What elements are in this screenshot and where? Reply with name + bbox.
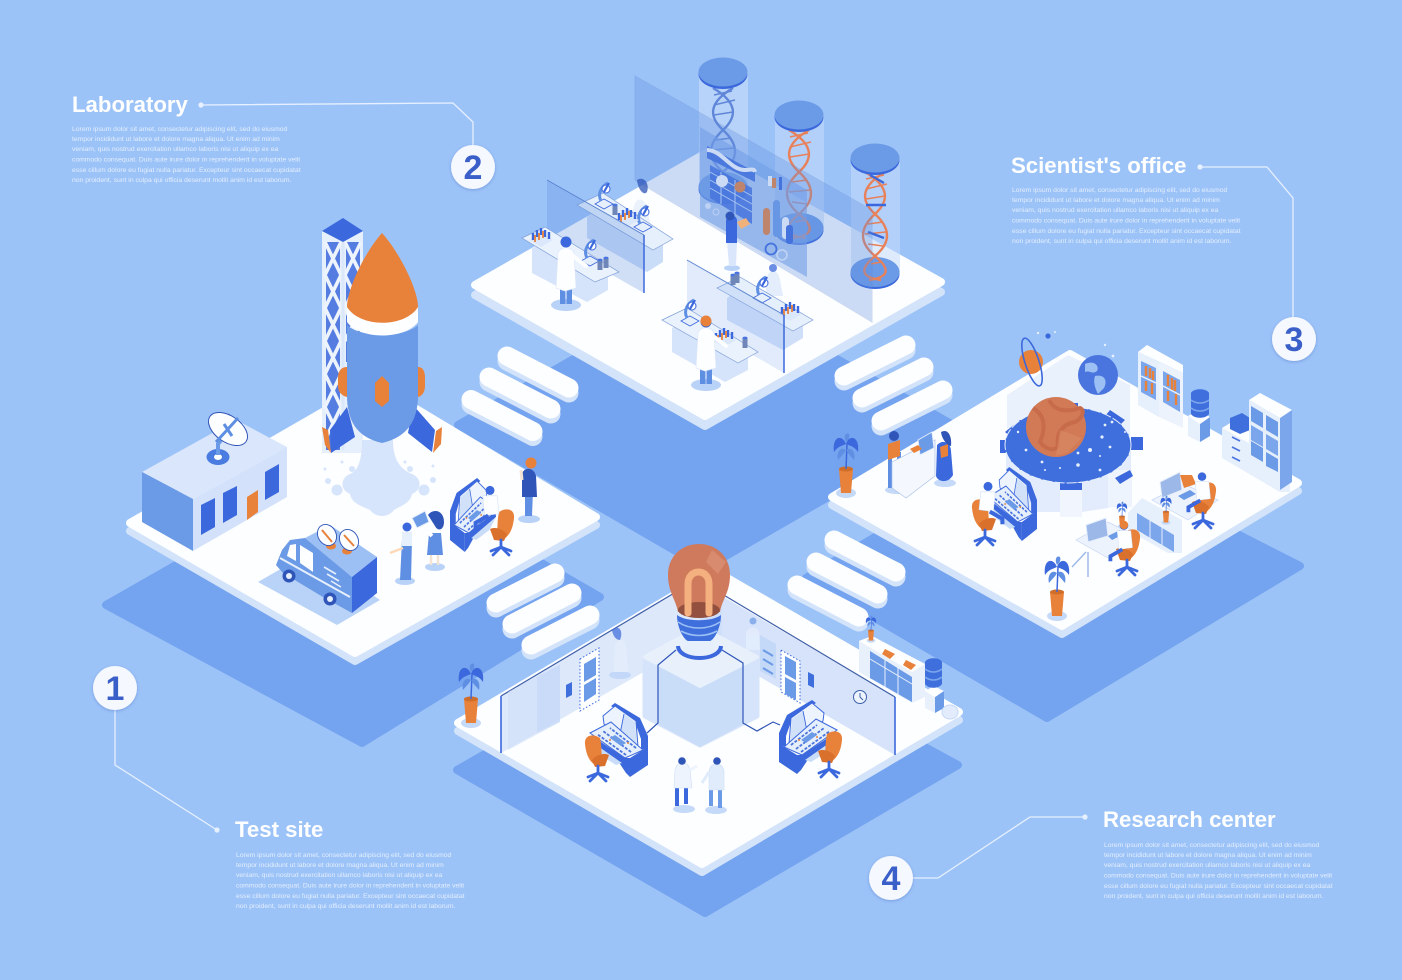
badge 3 (1272, 317, 1316, 361)
connector to badge 1 (115, 708, 220, 833)
plant front (1045, 556, 1069, 621)
partition A (547, 180, 644, 293)
description: esse cillum dolore eu fugiat nulla pariatur. Excepteur sint occaecat cupidatat (236, 893, 465, 900)
mars (1026, 397, 1086, 457)
panel: research center (458, 544, 959, 872)
description: tempor incididunt ut labore et dolore magna aliqua. Ut enim ad minim (72, 136, 280, 143)
stairs: laboratory to office (844, 345, 943, 426)
badge 4: 4 (882, 860, 901, 898)
description: non proident, sunt in culpa qui officia deserunt mollit anim id est laborum. (1012, 238, 1231, 245)
description: veniam, quis nostrud exercitation ullamco laboris nisi ut aliquip ex ea (72, 146, 278, 153)
holographic board (700, 127, 807, 277)
plant left (834, 433, 858, 498)
water cooler (1188, 389, 1210, 442)
description: veniam, quis nostrud exercitation ullamco laboris nisi ut aliquip ex ea (1012, 207, 1218, 214)
description: Lorem ipsum dolor sit amet, consectetur adipiscing elit, sed do eiusmod (72, 126, 288, 133)
scientist at the board (724, 212, 750, 271)
test site console and operator (450, 478, 514, 555)
scientist behind front bench (766, 264, 783, 296)
panel: laboratory (475, 58, 941, 426)
stairs: laboratory to test site (471, 356, 569, 436)
building with dish (142, 406, 287, 551)
connector to badge 4 (913, 814, 1088, 878)
description: tempor incididunt ut labore et dolore magna aliqua. Ut enim ad minim (236, 862, 444, 869)
back glass partition (635, 76, 872, 322)
saturn and stars (1018, 331, 1114, 388)
partition cabinet (1128, 498, 1182, 553)
scientist with lab coat, left (551, 236, 586, 311)
person behind wall, right (746, 618, 760, 650)
bench C (662, 300, 758, 382)
description: Lorem ipsum dolor sit amet, consectetur adipiscing elit, sed do eiusmod (1012, 187, 1228, 194)
description: non proident, sunt in culpa qui officia deserunt mollit anim id est laborum. (1104, 893, 1323, 900)
description: commodo consequat. Duis aute irure dolor in reprehenderit in voluptate velit (1012, 218, 1240, 224)
sideboard with plant (859, 616, 925, 703)
bench D (717, 272, 813, 350)
description (1012, 187, 1241, 245)
test site floor (130, 383, 596, 661)
badge 3: 3 (1285, 321, 1303, 359)
van with dishes (258, 521, 380, 625)
bench B with partition (577, 183, 673, 272)
laboratory floor (475, 152, 941, 426)
bookshelves (1138, 345, 1183, 428)
wires (647, 650, 780, 733)
description (1104, 842, 1333, 900)
office floor (832, 354, 1298, 634)
badge 1 (93, 666, 137, 710)
bench A (522, 227, 619, 302)
DNA cylinders (698, 58, 900, 289)
scientist behind bench (632, 179, 651, 228)
people with tablet (390, 511, 445, 585)
label: Laboratory (72, 92, 301, 184)
stairs: test site to research (496, 573, 590, 650)
description: tempor incididunt ut labore et dolore magna aliqua. Ut enim ad minim (1104, 852, 1312, 859)
description (72, 126, 301, 184)
right console and chair (779, 700, 842, 777)
light bulb (668, 544, 730, 658)
partition C (687, 260, 784, 373)
description (236, 852, 465, 910)
office console with operator (972, 467, 1037, 545)
round holo table (1000, 403, 1143, 517)
cabinet with shelves (1222, 393, 1292, 492)
doors and wall details (566, 635, 866, 711)
launch tower (322, 218, 363, 453)
pedestal (645, 627, 757, 747)
panel: scientist's office (832, 331, 1298, 634)
heading: Laboratory (72, 92, 189, 117)
description: esse cillum dolore eu fugiat nulla pariatur. Excepteur sint occaecat cupidatat (1012, 228, 1241, 235)
description: commodo consequat. Duis aute irure dolor in reprehenderit in voluptate velit (72, 156, 300, 164)
floor shadows (106, 284, 1300, 913)
description: Lorem ipsum dolor sit amet, consectetur adipiscing elit, sed do eiusmod (236, 852, 452, 859)
description: non proident, sunt in culpa qui officia deserunt mollit anim id est laborum. (236, 903, 455, 910)
research floor (458, 571, 959, 872)
badge 1: 1 (106, 670, 124, 708)
description: commodo consequat. Duis aute irure dolor in reprehenderit in voluptate velit (1104, 872, 1332, 880)
badge 4 (869, 856, 913, 900)
earth (1078, 355, 1118, 395)
plant (459, 663, 483, 728)
badge 2: 2 (464, 149, 482, 187)
glass backdrop (1007, 355, 1130, 470)
description: non proident, sunt in culpa qui officia deserunt mollit anim id est laborum. (72, 177, 291, 184)
description: Lorem ipsum dolor sit amet, consectetur adipiscing elit, sed do eiusmod (1104, 842, 1320, 849)
rocket (322, 233, 442, 453)
label: Research center (1103, 807, 1333, 900)
description: esse cillum dolore eu fugiat nulla pariatur. Excepteur sint occaecat cupidatat (72, 167, 301, 174)
heading: Research center (1103, 807, 1276, 832)
heading: Test site (235, 817, 323, 842)
back walls and inner floor (501, 592, 895, 755)
connector to badge 3 (1197, 164, 1293, 318)
desk with worker, back (1152, 472, 1218, 528)
description: commodo consequat. Duis aute irure dolor in reprehenderit in voluptate velit (236, 882, 464, 890)
badge 2 (451, 145, 495, 189)
description: veniam, quis nostrud exercitation ullamco laboris nisi ut aliquip ex ea (1104, 862, 1310, 869)
exhaust cloud (324, 440, 436, 516)
label: Test site (235, 817, 465, 910)
panel: test site (130, 218, 596, 661)
person behind wall, left (609, 628, 631, 679)
standing person (518, 458, 540, 523)
description: veniam, quis nostrud exercitation ullamco laboris nisi ut aliquip ex ea (236, 872, 442, 879)
description: esse cillum dolore eu fugiat nulla pariatur. Excepteur sint occaecat cupidatat (1104, 883, 1333, 890)
two scientists (673, 757, 727, 814)
left console and chair (585, 703, 648, 781)
water cooler (925, 658, 958, 719)
heading: Scientist's office (1011, 153, 1186, 178)
stairs: research to office (797, 540, 896, 622)
connector to badge 2 (198, 102, 473, 146)
scientist with lab coat, front (691, 316, 726, 391)
label: Scientist's office (1011, 153, 1241, 245)
desk with worker, front (1072, 502, 1140, 577)
reception desk with two people (885, 431, 956, 498)
description: tempor incididunt ut labore et dolore magna aliqua. Ut enim ad minim (1012, 197, 1220, 204)
